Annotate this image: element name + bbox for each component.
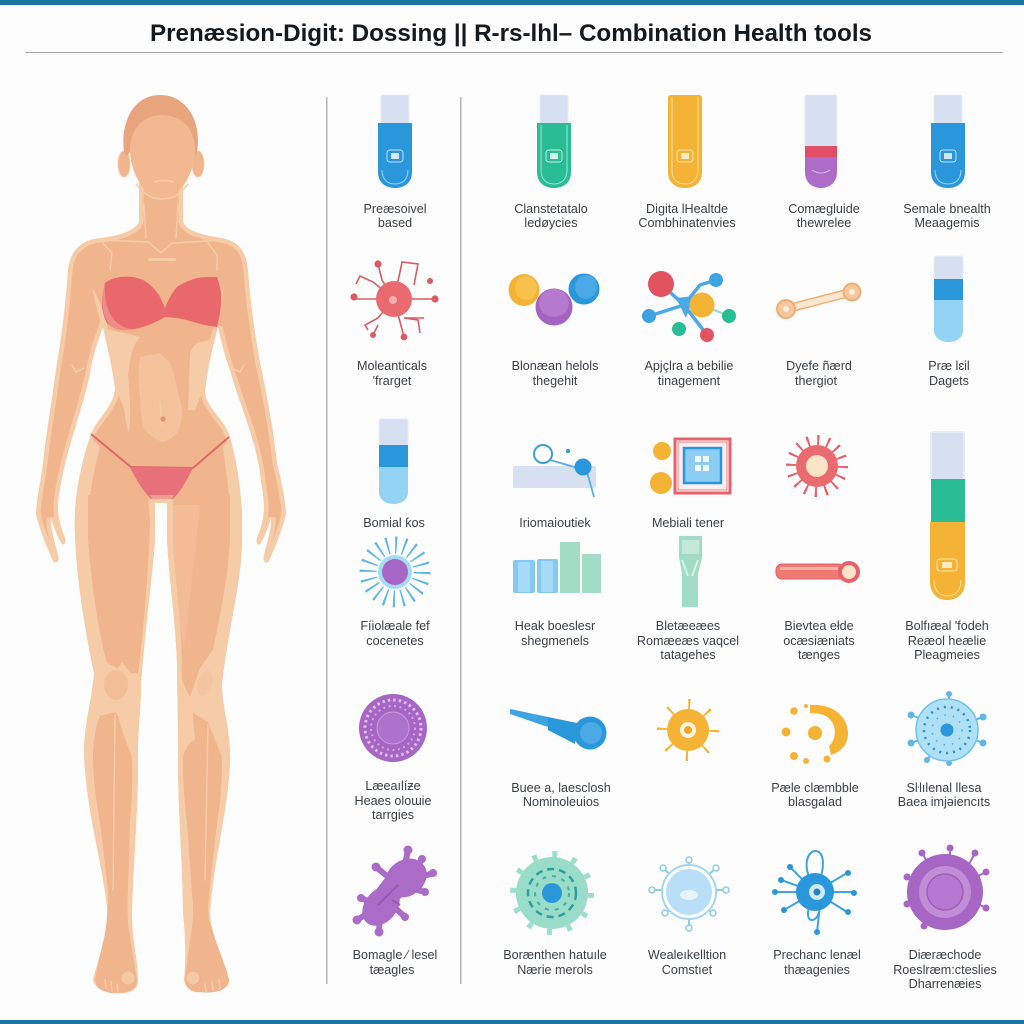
item: bar blocks	[513, 542, 601, 648]
label: Bletæeæes	[656, 619, 720, 633]
item: orange sun cell	[663, 705, 713, 755]
label: tarrgies	[372, 808, 414, 822]
label: cocenetes	[366, 634, 424, 648]
icon: green nucleus cell	[513, 854, 591, 932]
label: thewrelee	[797, 216, 851, 230]
label: Comægluide	[788, 202, 860, 216]
label: Fíiolæale fef	[360, 619, 430, 633]
label: Dagets	[929, 374, 969, 388]
icon: framed chip	[650, 439, 730, 494]
item: red rod	[776, 561, 860, 662]
label: tatagehes	[660, 648, 716, 662]
label: Bolfıæal 'fodeh	[905, 619, 989, 633]
item: blue star cell	[772, 851, 861, 977]
label: Wealeıkelltion	[648, 948, 726, 962]
label: Nærie merols	[517, 963, 593, 977]
icon: light blue vial	[934, 256, 963, 342]
label: Meaagemis	[914, 216, 980, 230]
item: green nucleus cell	[503, 854, 607, 977]
label: tinagement	[658, 374, 721, 388]
label: Apjçlra a bebilie	[645, 359, 733, 373]
item: blue vial right	[903, 95, 991, 230]
label: Heak boeslesr	[515, 619, 595, 633]
label: Heaes oloɯie	[354, 794, 432, 808]
item: purple vial	[788, 95, 860, 230]
icon: blue dropper	[510, 709, 606, 750]
item: pale blue cell	[648, 857, 729, 977]
label: Sŀlılenal llesa	[907, 781, 981, 795]
label: Buee a, laesclosh	[511, 781, 611, 795]
label: Mebiali tener	[652, 516, 724, 530]
label: Iriomaioutiek	[519, 516, 591, 530]
label: Semale bnealth	[903, 202, 991, 216]
label: Baea imjəiencıts	[898, 795, 990, 809]
label: 'frarget	[373, 374, 412, 388]
item: purple disc	[354, 694, 432, 822]
label: Bievtea ełde	[784, 619, 854, 633]
label: shegmenels	[521, 634, 589, 648]
icon: blue vial	[931, 95, 965, 188]
clothing: bottom	[91, 434, 229, 499]
item: red receptor cell	[350, 260, 439, 388]
item: light blue vial left	[363, 419, 425, 530]
left calf and foot	[93, 712, 137, 993]
item: purple virus cell	[893, 844, 997, 991]
right calf and foot	[183, 713, 230, 992]
icon: purple disc	[359, 694, 427, 762]
item: blue rayed cell	[360, 545, 430, 648]
label: based	[378, 216, 412, 230]
icon: green vial	[537, 95, 571, 188]
item: green vial	[514, 95, 588, 230]
icon: orange sun cell	[663, 705, 713, 755]
label: Digita lHealtde	[646, 202, 728, 216]
label: tæagles	[370, 963, 414, 977]
item: molecule network	[642, 271, 736, 388]
item: purple blob cell	[352, 846, 437, 977]
right thigh	[173, 495, 230, 697]
item: three spheres	[508, 274, 600, 388]
top accent bar	[0, 0, 1024, 5]
icon: blue star cell	[772, 851, 857, 935]
icon: purple virus cell	[904, 844, 990, 930]
clothing: top	[102, 277, 221, 330]
icon: purple blob cell	[352, 846, 437, 936]
icon: red rod	[776, 561, 860, 583]
title: Prenæsion-Digit: Dossing || R-rs-lhl– Combination Health tools	[150, 20, 872, 47]
label: tænges	[798, 648, 840, 662]
icon: tall tricolor vial	[930, 432, 965, 600]
label: Combhinatenvies	[638, 216, 736, 230]
head	[118, 95, 204, 199]
label: ledøycies	[524, 216, 578, 230]
icon: blue rayed cell	[368, 545, 422, 599]
label: thergiot	[795, 374, 837, 388]
item: orange crescent	[771, 704, 859, 809]
item: orange vial	[638, 95, 736, 230]
icon: probe on slab	[513, 445, 596, 497]
item: blue dropper	[510, 709, 611, 809]
body silhouette	[36, 170, 286, 1000]
icon: orange crescent	[782, 704, 848, 764]
label: Bomial ƙos	[363, 516, 425, 530]
label: Moleanticals	[357, 359, 427, 373]
label: Diæræchode	[909, 948, 981, 962]
icon: pale blue cell	[649, 857, 729, 931]
item: framed chip	[650, 439, 730, 530]
label: Prechanc lenæl	[773, 948, 861, 962]
human body figure	[36, 95, 286, 1000]
icon: molecule network	[642, 271, 736, 342]
item: blue speckled cell	[898, 691, 990, 809]
label: Dharrenæies	[909, 977, 981, 991]
right knee	[195, 669, 215, 697]
bottom accent bar	[0, 1020, 1024, 1024]
label: Borænthen hatuıle	[503, 948, 607, 962]
item: red spiked cell	[792, 441, 842, 491]
icon: red receptor cell	[350, 260, 439, 340]
icon: bar blocks	[513, 542, 601, 593]
item: light blue vial	[928, 256, 970, 388]
label: Reæol heælie	[908, 634, 986, 648]
label: Præ lɛil	[928, 359, 970, 373]
icon: purple and red vial	[805, 95, 837, 188]
label: Clanstetatalo	[514, 202, 588, 216]
label: Preæsoivel	[364, 202, 426, 216]
item: probe on slab	[513, 445, 596, 530]
label: Læeaılíƶe	[365, 779, 421, 793]
label: thegehit	[533, 374, 578, 388]
item: green brush	[637, 536, 739, 662]
icon: light blue vial	[379, 419, 408, 504]
label: Roeslræm:cteslies	[893, 963, 997, 977]
icon: blue speckled cell	[908, 691, 986, 766]
item: bone rod	[777, 284, 860, 388]
label: Nominoleuios	[523, 795, 599, 809]
label: thæagenies	[784, 963, 850, 977]
label: Bomagle ⁄ lesel	[353, 948, 437, 962]
label: Blonæan helols	[512, 359, 598, 373]
icon: rod with two ends	[777, 284, 860, 318]
left knee	[104, 670, 128, 700]
icon: blue vial	[378, 95, 412, 188]
label: Pæle clæmbble	[771, 781, 859, 795]
label: Dyefe ñærd	[786, 359, 852, 373]
label: Romæeæs vaqcel	[637, 634, 739, 648]
label: blasɡalad	[788, 795, 842, 809]
icon: orange vial	[668, 95, 702, 188]
item: blue vial	[364, 95, 426, 230]
label: Pleagmeies	[914, 648, 980, 662]
left thigh	[88, 495, 150, 673]
icon: red spiked cell	[792, 441, 842, 491]
item: tall tricolor vial	[905, 432, 989, 662]
label: Comstıet	[662, 963, 713, 977]
icon: three spheres	[508, 274, 600, 326]
label: ocæsiæniats	[783, 634, 855, 648]
icon: green brush	[679, 536, 702, 607]
